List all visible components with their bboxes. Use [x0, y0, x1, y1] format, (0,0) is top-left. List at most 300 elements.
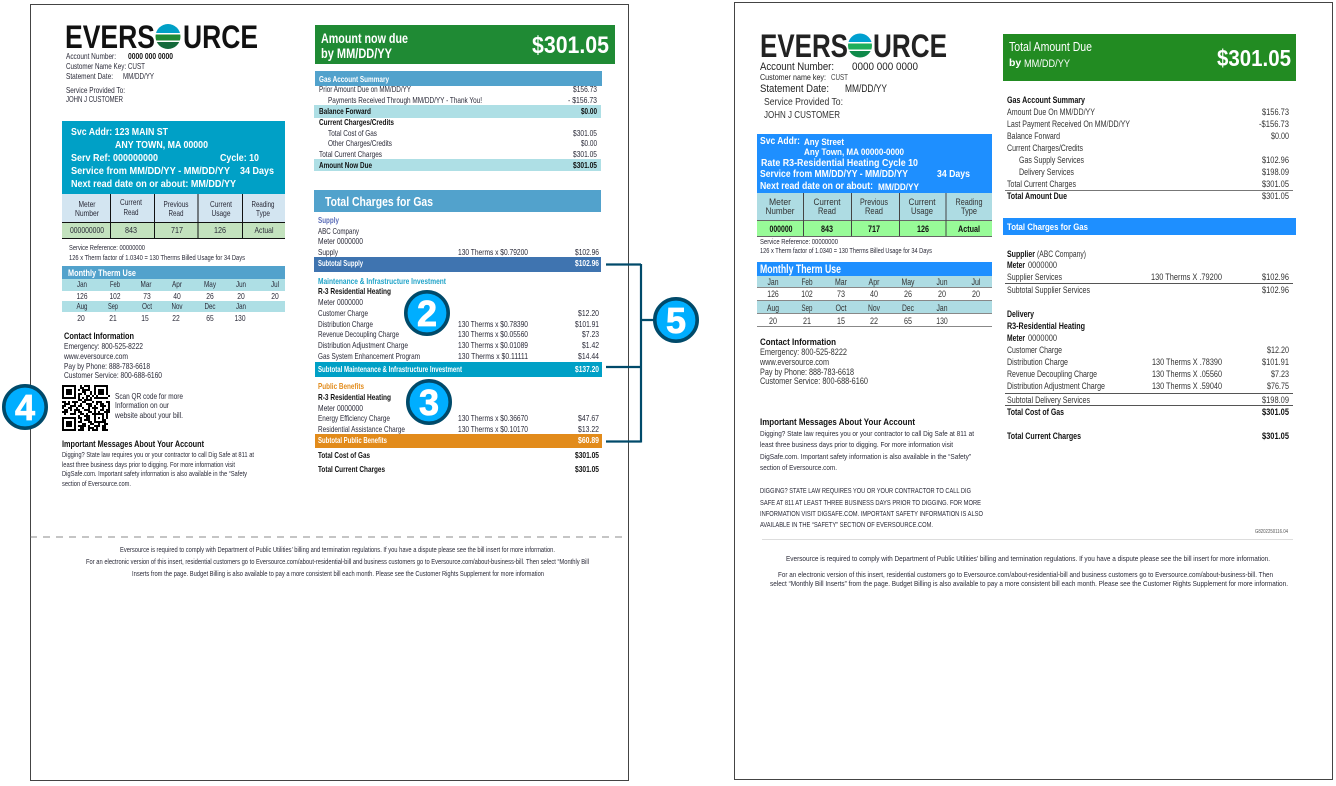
delivery section: 130 Therms X .78390	[1152, 357, 1222, 367]
amount due banner right: MM/DD/YY	[1024, 58, 1071, 70]
service reference note left	[69, 245, 245, 262]
important messages left: Digging? State law requires you or your contractor to call Dig Safe at 811 at	[62, 450, 255, 459]
monthly therm use table left: Mar	[140, 279, 152, 289]
service address panel left: Next read date on or about: MM/DD/YY	[71, 178, 236, 190]
important messages right	[760, 417, 983, 529]
panel: left bill page	[30, 4, 628, 780]
gas account summary left	[314, 71, 602, 171]
total charges for gas right	[1003, 218, 1296, 441]
monthly therm use table left: Jan	[236, 301, 246, 311]
contact information right: www.eversource.com	[759, 357, 829, 367]
gas account summary right: Gas Account Summary	[1007, 95, 1085, 105]
meter table right: 843	[821, 224, 833, 234]
service reference note right	[760, 239, 932, 255]
meter table right	[757, 193, 992, 236]
contact information right: Pay by Phone: 888-783-6618	[760, 367, 854, 377]
service address panel right: Next read date on or about:	[760, 181, 873, 192]
service address panel left: ANY TOWN, MA 00000	[115, 139, 208, 151]
meter table left: Current	[210, 199, 232, 209]
meter table right: Current	[814, 197, 841, 208]
footer notice left: For an electronic version of this insert, residential customers go to Eversource.com/about-residential-bill and business customers go to Eversource.com/about-business-bill. Then select “Monthly Bill	[86, 559, 589, 566]
monthly therm use table left: 22	[172, 313, 180, 323]
monthly therm use table left: Jul	[271, 279, 279, 289]
totals right: $301.05	[1262, 431, 1289, 441]
public benefits section: R-3 Residential Heating	[318, 392, 391, 402]
important messages left: section of Eversource.com.	[62, 479, 131, 488]
footer notice left: Eversource is required to comply with Department of Public Utilities’ billing and termination regulations. If you have a dispute please see the bill insert for more information.	[120, 547, 555, 554]
maintenance and infrastructure section: Revenue Decoupling Charge	[318, 329, 399, 339]
document code: G8202250116.04	[1255, 529, 1288, 535]
public benefits section: $13.22	[578, 424, 599, 434]
monthly therm use table right: 65	[904, 316, 912, 327]
service address panel left: 34 Days	[240, 165, 274, 177]
meter table left: Previous	[164, 199, 188, 209]
contact information left: www.eversource.com	[63, 351, 128, 361]
amount due banner right: Total Amount Due	[1009, 40, 1092, 54]
monthly therm use table right: 73	[837, 289, 845, 300]
meter table right: 000000	[770, 224, 792, 234]
delivery section: Meter	[1007, 333, 1025, 343]
account details right: Service Provided To:	[764, 97, 843, 108]
gas account summary left: Balance Forward	[319, 106, 371, 116]
public benefits section: 130 Therms x $0.10170	[458, 424, 528, 434]
service address panel right: Any Street	[804, 137, 845, 148]
maintenance and infrastructure section: Meter 0000000	[318, 297, 363, 307]
gas account summary right: $198.09	[1262, 167, 1289, 177]
monthly therm use table left: 65	[206, 313, 214, 323]
service address panel left	[62, 121, 285, 194]
maintenance and infrastructure section: Subtotal Maintenance & Infrastructure Investment	[318, 365, 462, 374]
service address panel right: 34 Days	[937, 169, 970, 180]
delivery section: Revenue Decoupling Charge	[1007, 369, 1097, 379]
gas account summary left: Total Current Charges	[319, 149, 382, 159]
badge 3	[408, 381, 450, 423]
maintenance and infrastructure section: Gas System Enhancement Program	[318, 351, 420, 361]
service reference note right: 126 x Therm factor of 1.0340 = 130 Therms Billed Usage for 34 Days	[760, 248, 932, 255]
service reference note left: Service Reference: 00000000	[69, 245, 145, 252]
monthly therm use table left: Jan	[77, 279, 87, 289]
account details right: Customer name key:	[760, 73, 826, 82]
service address panel left: Serv Ref: 000000000	[71, 152, 158, 164]
public benefits section: Energy Efficiency Charge	[318, 413, 390, 423]
gas account summary left: - $156.73	[568, 95, 597, 105]
monthly therm use table left: 20	[271, 291, 279, 301]
monthly therm use table left: 130	[234, 313, 246, 323]
monthly therm use table right: 15	[837, 316, 845, 327]
monthly therm use table left: 73	[143, 291, 151, 301]
contact information left	[63, 331, 162, 380]
monthly therm use table left: 15	[141, 313, 149, 323]
meter table left: Actual	[254, 225, 274, 235]
totals right: Total Current Charges	[1007, 431, 1081, 441]
supplier section: (ABC Company)	[1037, 249, 1086, 259]
delivery section: Delivery	[1007, 309, 1034, 319]
account details right: CUST	[831, 73, 848, 82]
footer notice left	[86, 547, 589, 578]
delivery section	[1005, 309, 1293, 406]
amount due banner right: $301.05	[1217, 45, 1291, 71]
gas account summary right: Total Amount Due	[1007, 191, 1067, 201]
monthly therm use table left: 40	[173, 291, 181, 301]
monthly therm use table right: 20	[769, 316, 777, 327]
account details right: MM/DD/YY	[845, 83, 888, 95]
badge 5	[655, 299, 697, 341]
badge 2	[406, 292, 448, 334]
footer notice right	[770, 554, 1288, 588]
supply section: Meter 0000000	[318, 236, 363, 246]
QR caption: Information on our	[115, 400, 169, 410]
supply section: 130 Therms x $0.79200	[458, 247, 528, 257]
monthly therm use table right: Monthly Therm Use	[760, 264, 841, 276]
important messages right: Digging? State law requires you or your contractor to call Dig Safe at 811 at	[760, 429, 975, 438]
monthly therm use table right: 126	[767, 289, 779, 300]
gas account summary left: Amount Now Due	[319, 160, 372, 170]
meter table right: 126	[917, 224, 929, 234]
gas account summary right: Last Payment Received On MM/DD/YY	[1007, 119, 1130, 129]
maintenance and infrastructure section: Maintenance & Infrastructure Investment	[318, 276, 446, 286]
meter table left: Meter	[78, 199, 96, 209]
account details right: JOHN J CUSTOMER	[764, 110, 840, 121]
important messages right: Important Messages About Your Account	[760, 417, 916, 428]
account details left: Customer Name Key: CUST	[66, 61, 145, 71]
service address panel left: Svc Addr: 123 MAIN ST	[71, 126, 168, 138]
delivery section: $101.91	[1262, 357, 1289, 367]
meter table left: Reading	[252, 199, 275, 209]
amount due banner left	[315, 25, 615, 64]
monthly therm use table right: May	[902, 277, 915, 288]
amount due banner left: $301.05	[532, 32, 609, 59]
delivery section: Subtotal Delivery Services	[1007, 395, 1090, 405]
monthly therm use table left: Sep	[108, 301, 118, 311]
meter table right: Previous	[860, 197, 888, 208]
delivery section: $198.09	[1262, 395, 1289, 405]
account details right: 0000 000 0000	[852, 61, 918, 73]
account details left	[66, 51, 173, 104]
gas account summary right: Balance Forward	[1007, 131, 1060, 141]
account details left: 0000 000 0000	[128, 51, 173, 61]
total charges for gas left: Total Charges for Gas	[325, 194, 433, 209]
monthly therm use table right: 22	[870, 316, 878, 327]
supplier section: 130 Therms X .79200	[1151, 272, 1222, 282]
important messages right: DigSafe.com. Important safety information is also available in the “Safety”	[760, 452, 971, 461]
delivery section: $76.75	[1267, 381, 1289, 391]
meter table right: Read	[865, 206, 883, 217]
account details left: MM/DD/YY	[123, 71, 154, 81]
public benefits section: Residential Assistance Charge	[318, 424, 405, 434]
service address panel right: MM/DD/YY	[878, 182, 920, 193]
delivery section: 130 Therms X .59040	[1152, 381, 1222, 391]
monthly therm use table right: Oct	[836, 303, 847, 314]
service address panel right	[757, 134, 992, 193]
public benefits section: $60.89	[578, 436, 599, 445]
meter table left: Usage	[212, 208, 231, 218]
gas account summary right: $301.05	[1262, 179, 1289, 189]
badge 5: 5	[666, 300, 686, 341]
maintenance and infrastructure section: Distribution Charge	[318, 319, 373, 329]
maintenance and infrastructure section	[315, 276, 602, 377]
monthly therm use table right: 26	[904, 289, 912, 300]
logo: Eversource right: EVERS	[760, 28, 848, 64]
monthly therm use table right: Nov	[868, 303, 880, 314]
important messages right: SAFE AT 811 AT LEAST THREE BUSINESS DAYS PRIOR TO DIGGING. FOR MORE	[760, 498, 981, 507]
monthly therm use table left: 20	[77, 313, 85, 323]
total charges for gas left	[314, 190, 602, 474]
monthly therm use table left: Monthly Therm Use	[68, 268, 136, 279]
footer notice left: Inserts from the page. Budget Billing is also available to pay a more consistent bill each month. Please see the Customer Rights Supplement for more information	[132, 571, 544, 578]
monthly therm use table right: Aug	[767, 303, 779, 314]
public benefits section: 130 Therms x $0.36670	[458, 413, 528, 423]
public benefits section: Public Benefits	[318, 381, 364, 391]
public benefits section: $47.67	[578, 413, 599, 423]
gas account summary right: $0.00	[1271, 131, 1289, 141]
monthly therm use table right: Mar	[835, 277, 847, 288]
totals right	[1007, 407, 1289, 441]
gas account summary right: $102.96	[1262, 155, 1289, 165]
account details left: JOHN J CUSTOMER	[66, 94, 123, 104]
meter table right: Read	[818, 206, 836, 217]
contact information left: Customer Service: 800-688-6160	[64, 370, 162, 380]
supplier section: Meter	[1007, 260, 1025, 270]
service reference note left: 126 x Therm factor of 1.0340 = 130 Therms Billed Usage for 34 Days	[69, 255, 245, 262]
maintenance and infrastructure section: $1.42	[582, 340, 599, 350]
account details right: Statement Date:	[760, 83, 829, 95]
logo: Eversource left	[66, 24, 257, 49]
monthly therm use table right: Jun	[936, 277, 948, 288]
monthly therm use table left: Apr	[172, 279, 182, 289]
monthly therm use table left: Feb	[110, 279, 120, 289]
contact information left: Pay by Phone: 888-783-6618	[64, 361, 150, 371]
supplier section: Supplier	[1007, 249, 1035, 259]
amount due banner right: by	[1009, 57, 1021, 69]
gas account summary left: Gas Account Summary	[319, 75, 389, 84]
gas account summary right	[1005, 95, 1293, 201]
account details right: Account Number:	[760, 61, 834, 73]
delivery section: 130 Therms X .05560	[1152, 369, 1222, 379]
maintenance and infrastructure section: $101.91	[575, 319, 599, 329]
service reference note right: Service Reference: 00000000	[760, 239, 838, 246]
important messages left	[62, 439, 255, 488]
monthly therm use table right: 20	[972, 289, 980, 300]
meter table left: Read	[124, 207, 139, 217]
service address panel right: Any Town, MA 00000-0000	[804, 147, 904, 158]
gas account summary left: Other Charges/Credits	[328, 138, 392, 148]
meter table left: Current	[120, 197, 142, 207]
meter table right: Usage	[911, 206, 933, 217]
gas account summary right: Total Current Charges	[1007, 179, 1076, 189]
important messages right: least three business days prior to digging. For more information visit	[760, 440, 954, 449]
QR code	[62, 385, 110, 431]
monthly therm use table left: May	[204, 279, 217, 289]
monthly therm use table right: 102	[801, 289, 813, 300]
gas account summary left: Prior Amount Due on MM/DD/YY	[319, 84, 411, 94]
maintenance and infrastructure section: Customer Charge	[318, 308, 368, 318]
monthly therm use table right: 21	[803, 316, 811, 327]
meter table left	[62, 194, 285, 239]
service address panel right: Svc Addr:	[760, 136, 800, 147]
badge 4: 4	[15, 387, 35, 428]
contact information right: Contact Information	[760, 337, 836, 348]
supply section: Supply	[318, 215, 339, 225]
important messages left: least three business days prior to digging. For more information visit	[62, 460, 236, 469]
maintenance and infrastructure section: $137.20	[575, 365, 599, 374]
delivery section: R3-Residential Heating	[1007, 321, 1085, 331]
gas account summary right: -$156.73	[1259, 119, 1289, 129]
supply section: $102.96	[575, 259, 599, 268]
important messages right: section of Eversource.com.	[760, 463, 837, 472]
service address panel left: Cycle: 10	[220, 152, 259, 164]
delivery section: $12.20	[1267, 345, 1289, 355]
monthly therm use table left: Dec	[204, 301, 216, 311]
contact information left: Contact Information	[64, 331, 134, 341]
gas account summary left: Current Charges/Credits	[319, 117, 394, 127]
meter table left: 843	[125, 225, 137, 235]
important messages right: AVAILABLE IN THE “SAFETY” SECTION OF EVERSOURCE.COM.	[760, 520, 933, 529]
totals left: Total Cost of Gas	[318, 450, 370, 460]
logo: Eversource right: URCE	[873, 28, 947, 64]
maintenance and infrastructure section: R-3 Residential Heating	[318, 286, 391, 296]
supplier section: 0000000	[1028, 260, 1057, 270]
totals right: Total Cost of Gas	[1007, 407, 1064, 417]
meter table right: Current	[908, 197, 936, 208]
meter table right: Type	[961, 206, 977, 217]
supply section: ABC Company	[318, 226, 360, 236]
important messages right: DIGGING? STATE LAW REQUIRES YOU OR YOUR CONTRACTOR TO CALL DIG	[760, 486, 971, 495]
meter table left: Read	[168, 208, 184, 218]
maintenance and infrastructure section: Distribution Adjustment Charge	[318, 340, 408, 350]
contact information right: Customer Service: 800-688-6160	[760, 376, 868, 386]
supplier section: $102.96	[1262, 272, 1289, 282]
meter table left: 000000000	[70, 225, 104, 235]
supplier section: Subtotal Supplier Services	[1007, 285, 1090, 295]
account details left: Service Provided To:	[66, 85, 125, 95]
logo: Eversource left: URCE	[183, 19, 258, 55]
monthly therm use table left	[62, 266, 285, 323]
monthly therm use table right: Jul	[972, 277, 980, 288]
gas account summary right: Amount Due On MM/DD/YY	[1007, 107, 1095, 117]
meter table right: Meter	[769, 197, 791, 208]
supply section: Subtotal Supply	[318, 259, 363, 268]
monthly therm use table left: Jun	[236, 279, 246, 289]
amount due banner left: by MM/DD/YY	[321, 46, 392, 61]
panel: right bill page	[734, 2, 1332, 780]
gas account summary left: $156.73	[573, 84, 597, 94]
monthly therm use table right: Jan	[936, 303, 948, 314]
gas account summary left: $301.05	[573, 160, 597, 170]
logo: Eversource left: EVERS	[65, 19, 155, 55]
delivery section: Distribution Charge	[1007, 357, 1068, 367]
supplier section: Supplier Services	[1007, 272, 1062, 282]
gas account summary right: Current Charges/Credits	[1007, 143, 1083, 153]
monthly therm use table right: Feb	[802, 277, 812, 288]
totals right: $301.05	[1262, 407, 1289, 417]
badge 2: 2	[417, 293, 437, 334]
account details left: Account Number:	[66, 51, 116, 61]
monthly therm use table left: Nov	[172, 301, 183, 311]
meter table right: Number	[766, 206, 794, 217]
monthly therm use table right: Dec	[902, 303, 914, 314]
meter table right: 717	[868, 224, 880, 234]
monthly therm use table right: 130	[936, 316, 948, 327]
totals left: $301.05	[575, 464, 599, 474]
maintenance and infrastructure section: $7.23	[582, 329, 599, 339]
supply section: Supply	[318, 247, 339, 257]
totals left	[318, 450, 599, 474]
monthly therm use table right: 40	[870, 289, 878, 300]
important messages right: INFORMATION VISIT DIGSAFE.COM. IMPORTANT SAFETY INFORMATION IS ALSO	[760, 509, 983, 518]
service address panel right: Service from MM/DD/YY - MM/DD/YY	[760, 169, 908, 180]
meter table left: Number	[75, 208, 99, 218]
meter table right: Reading	[956, 197, 982, 208]
QR caption: website about your bill.	[114, 410, 183, 420]
gas account summary right: Delivery Services	[1019, 167, 1074, 177]
gas account summary right: Gas Supply Services	[1019, 155, 1084, 165]
monthly therm use table left: 102	[110, 291, 121, 301]
maintenance and infrastructure section: 130 Therms x $0.78390	[458, 319, 528, 329]
maintenance and infrastructure section: $12.20	[578, 308, 599, 318]
supply section: $102.96	[575, 247, 599, 257]
gas account summary left: $0.00	[581, 138, 597, 148]
monthly therm use table right: Sep	[802, 303, 812, 314]
gas account summary left: $301.05	[573, 149, 597, 159]
QR caption: Scan QR code for more	[115, 391, 183, 401]
public benefits section	[315, 381, 602, 448]
delivery section: 0000000	[1028, 333, 1057, 343]
meter table right: Actual	[958, 224, 980, 234]
gas account summary left: Payments Received Through MM/DD/YY - Thank You!	[328, 95, 482, 105]
totals left: Total Current Charges	[318, 464, 385, 474]
monthly therm use table left: 20	[237, 291, 245, 301]
monthly therm use table left: Oct	[142, 301, 152, 311]
gas account summary left: Total Cost of Gas	[328, 128, 377, 138]
logo: Eversource right	[762, 34, 946, 58]
account details right	[760, 61, 918, 121]
meter table left: 126	[214, 225, 226, 235]
monthly therm use table right	[757, 262, 992, 327]
supply section	[314, 215, 601, 272]
gas account summary left: $0.00	[581, 106, 597, 116]
QR caption	[114, 391, 183, 420]
public benefits section: Subtotal Public Benefits	[318, 436, 387, 445]
badge 3: 3	[419, 382, 439, 423]
monthly therm use table left: 26	[206, 291, 214, 301]
delivery section: Customer Charge	[1007, 345, 1062, 355]
monthly therm use table right: Apr	[868, 277, 880, 288]
gas account summary left: $301.05	[573, 128, 597, 138]
maintenance and infrastructure section: 130 Therms x $0.01089	[458, 340, 528, 350]
important messages left: DigSafe.com. Important safety information is also available in the “Safety	[62, 469, 247, 478]
maintenance and infrastructure section: 130 Therms x $0.11111	[458, 351, 528, 361]
service address panel left: Service from MM/DD/YY - MM/DD/YY	[71, 165, 230, 177]
monthly therm use table right: 20	[938, 289, 946, 300]
delivery section: Distribution Adjustment Charge	[1007, 381, 1105, 391]
maintenance and infrastructure section: $14.44	[578, 351, 599, 361]
monthly therm use table right: Jan	[768, 277, 778, 288]
monthly therm use table left: 21	[109, 313, 117, 323]
gas account summary right: $301.05	[1262, 191, 1289, 201]
maintenance and infrastructure section: 130 Therms x $0.05560	[458, 329, 528, 339]
contact information right: Emergency: 800-525-8222	[760, 347, 847, 357]
meter table left: 717	[171, 225, 183, 235]
monthly therm use table left: 126	[76, 291, 88, 301]
contact information right	[759, 337, 868, 386]
contact information left: Emergency: 800-525-8222	[64, 341, 143, 351]
supplier section	[1005, 249, 1293, 295]
totals left: $301.05	[575, 450, 599, 460]
gas account summary right: $156.73	[1262, 107, 1289, 117]
meter table left: Type	[256, 208, 270, 218]
service address panel right: Rate R3-Residential Heating Cycle 10	[761, 158, 918, 169]
monthly therm use table left: Aug	[76, 301, 88, 311]
